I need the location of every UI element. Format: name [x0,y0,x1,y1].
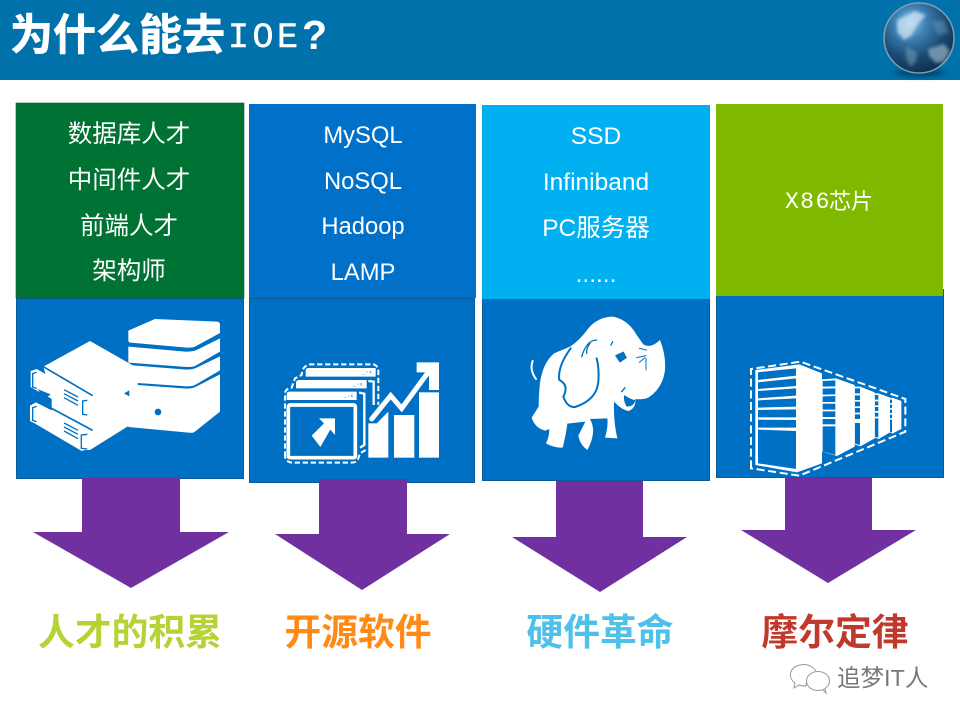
title: 为什么能去 [10,12,225,60]
icon: windows and growth chart [285,362,439,463]
hardware list: ...... [576,261,616,288]
open source list [321,122,405,286]
watermark [790,665,928,693]
arrow: open source [275,479,450,590]
server fronts [31,369,92,416]
panel: moore's law [716,104,944,478]
icon: windows and growth chart: _ ▫ x [352,381,363,386]
icon: windows and growth chart: _ ▫ x [362,370,372,375]
icon: server racks [751,362,905,476]
icon: globe [884,3,954,77]
icon: elephant [532,317,665,450]
talent list: 中间件人才 [68,166,190,194]
label: talent accumulation: 人才的积累 [38,612,222,653]
hardware list: Infiniband [543,169,649,196]
title [10,12,327,60]
watermark text: 追梦IT人 [837,665,928,691]
chip label: X86 [785,189,831,215]
open source list: Hadoop [321,213,405,240]
icon: chat bubbles [790,665,830,693]
talent list: 数据库人才 [68,120,190,148]
panel: talent [16,103,244,478]
header bar [0,0,960,80]
open source list: MySQL [323,122,403,149]
label: open source software: 开源软件 [284,612,432,653]
chip label: 芯片 [829,189,873,214]
hardware list [542,123,650,288]
label: hardware revolution: 硬件革命 [526,612,674,653]
title: ? [302,12,327,58]
arrow: moore's law [741,478,916,583]
talent list: 架构师 [92,257,166,285]
panel: open source [249,104,476,482]
talent list: 前端人才 [80,212,178,240]
hardware list: PC服务器 [542,214,650,242]
title: IOE [228,18,302,58]
arrow: talent [33,478,229,588]
open source list: LAMP [331,259,395,286]
hardware list: SSD [571,123,621,150]
chip label [785,189,873,215]
label: moore's law: 摩尔定律 [761,612,909,653]
panel: hardware [482,105,710,480]
arrow: hardware [512,481,687,592]
icon: windows and growth chart: _ ▫ x [343,393,354,398]
open source list: NoSQL [324,168,402,195]
talent list [68,120,190,285]
icon: servers and database [30,319,220,451]
